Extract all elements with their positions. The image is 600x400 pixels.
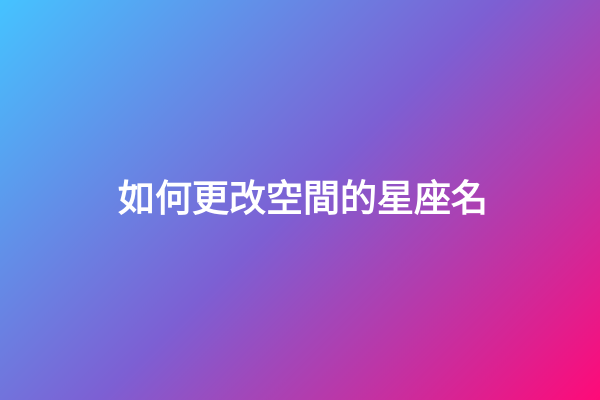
- title: 如何更改空間的星座名: [118, 178, 488, 219]
